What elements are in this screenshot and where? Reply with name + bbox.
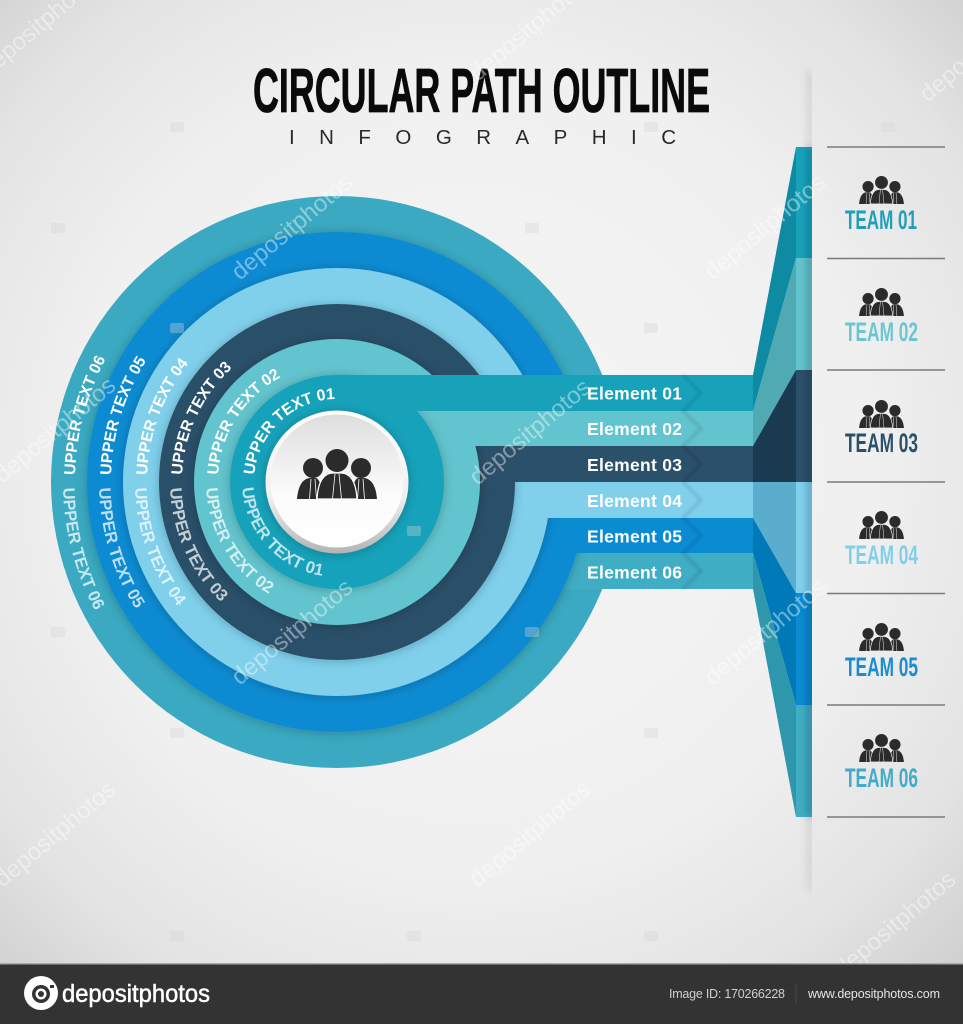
strip labels: Element 03 bbox=[587, 455, 682, 475]
panel: team list bbox=[827, 147, 945, 817]
strip labels: Element 01 bbox=[587, 384, 682, 404]
team 02: TEAM 02 bbox=[845, 317, 918, 347]
watermarks: depositphotos bbox=[699, 169, 831, 286]
band 06 bbox=[51, 196, 753, 768]
curved lower labels bbox=[63, 487, 322, 610]
team 02 bbox=[845, 288, 918, 347]
curved lower labels: UPPER TEXT 04 bbox=[135, 488, 186, 606]
watermarks: depositphotos bbox=[226, 169, 358, 286]
curved lower labels: UPPER TEXT 01 bbox=[242, 487, 322, 576]
curved upper labels: UPPER TEXT 01 bbox=[244, 388, 335, 474]
image id: Image ID: 170266228 bbox=[669, 987, 785, 1001]
watermarks: depositphotos bbox=[829, 866, 961, 983]
arrow chevrons on strips bbox=[683, 375, 701, 589]
panel edge shadow bbox=[807, 70, 813, 890]
subtitle: INFOGRAPHIC bbox=[289, 126, 676, 149]
team 03: TEAM 03 bbox=[845, 428, 918, 458]
curved upper labels: UPPER TEXT 04 bbox=[136, 358, 188, 474]
curved upper labels: UPPER TEXT 02 bbox=[207, 369, 280, 474]
watermarks: depositphotos bbox=[464, 374, 596, 491]
strip labels: Element 04 bbox=[587, 491, 682, 511]
curved lower labels: UPPER TEXT 06 bbox=[63, 488, 104, 610]
team 01 bbox=[845, 176, 917, 235]
curved lower labels: UPPER TEXT 03 bbox=[170, 488, 228, 601]
icon: camera logo bbox=[24, 976, 58, 1010]
team 06 bbox=[845, 734, 918, 793]
band 01 bbox=[230, 375, 753, 589]
site url: www.depositphotos.com bbox=[807, 987, 940, 1001]
icon: center team bbox=[297, 449, 377, 499]
curved upper labels: UPPER TEXT 05 bbox=[100, 356, 145, 474]
curved upper labels: UPPER TEXT 03 bbox=[171, 362, 231, 474]
band 03 bbox=[159, 304, 753, 660]
curved lower labels: UPPER TEXT 02 bbox=[206, 488, 274, 594]
curved upper labels: UPPER TEXT 06 bbox=[64, 356, 104, 474]
strip labels: Element 06 bbox=[587, 562, 682, 582]
logo wordmark: depositphotos bbox=[62, 980, 210, 1008]
curved lower labels: UPPER TEXT 05 bbox=[99, 488, 145, 608]
band 04 bbox=[123, 268, 753, 696]
band 02 bbox=[194, 339, 753, 625]
team 06: TEAM 06 bbox=[845, 763, 918, 793]
strip labels bbox=[587, 384, 682, 582]
watermarks: depositphotos bbox=[226, 574, 358, 691]
team 01: TEAM 01 bbox=[845, 205, 917, 235]
team 05 bbox=[845, 623, 918, 682]
team 05: TEAM 05 bbox=[845, 652, 918, 682]
watermarks: depositphotos bbox=[699, 574, 831, 691]
team 04: TEAM 04 bbox=[845, 540, 918, 570]
band 05 bbox=[87, 232, 753, 732]
footer bar bbox=[0, 963, 963, 1024]
center badge bbox=[266, 410, 408, 554]
bar edge shading bbox=[808, 147, 814, 817]
folded connector: right-hand folds and bar bbox=[753, 147, 812, 817]
strip labels: Element 02 bbox=[587, 419, 682, 439]
strip labels: Element 05 bbox=[587, 526, 682, 546]
curved upper labels bbox=[64, 356, 335, 474]
watermarks: depositphotos bbox=[464, 776, 596, 893]
team 03 bbox=[845, 400, 918, 458]
team 04 bbox=[845, 511, 918, 570]
